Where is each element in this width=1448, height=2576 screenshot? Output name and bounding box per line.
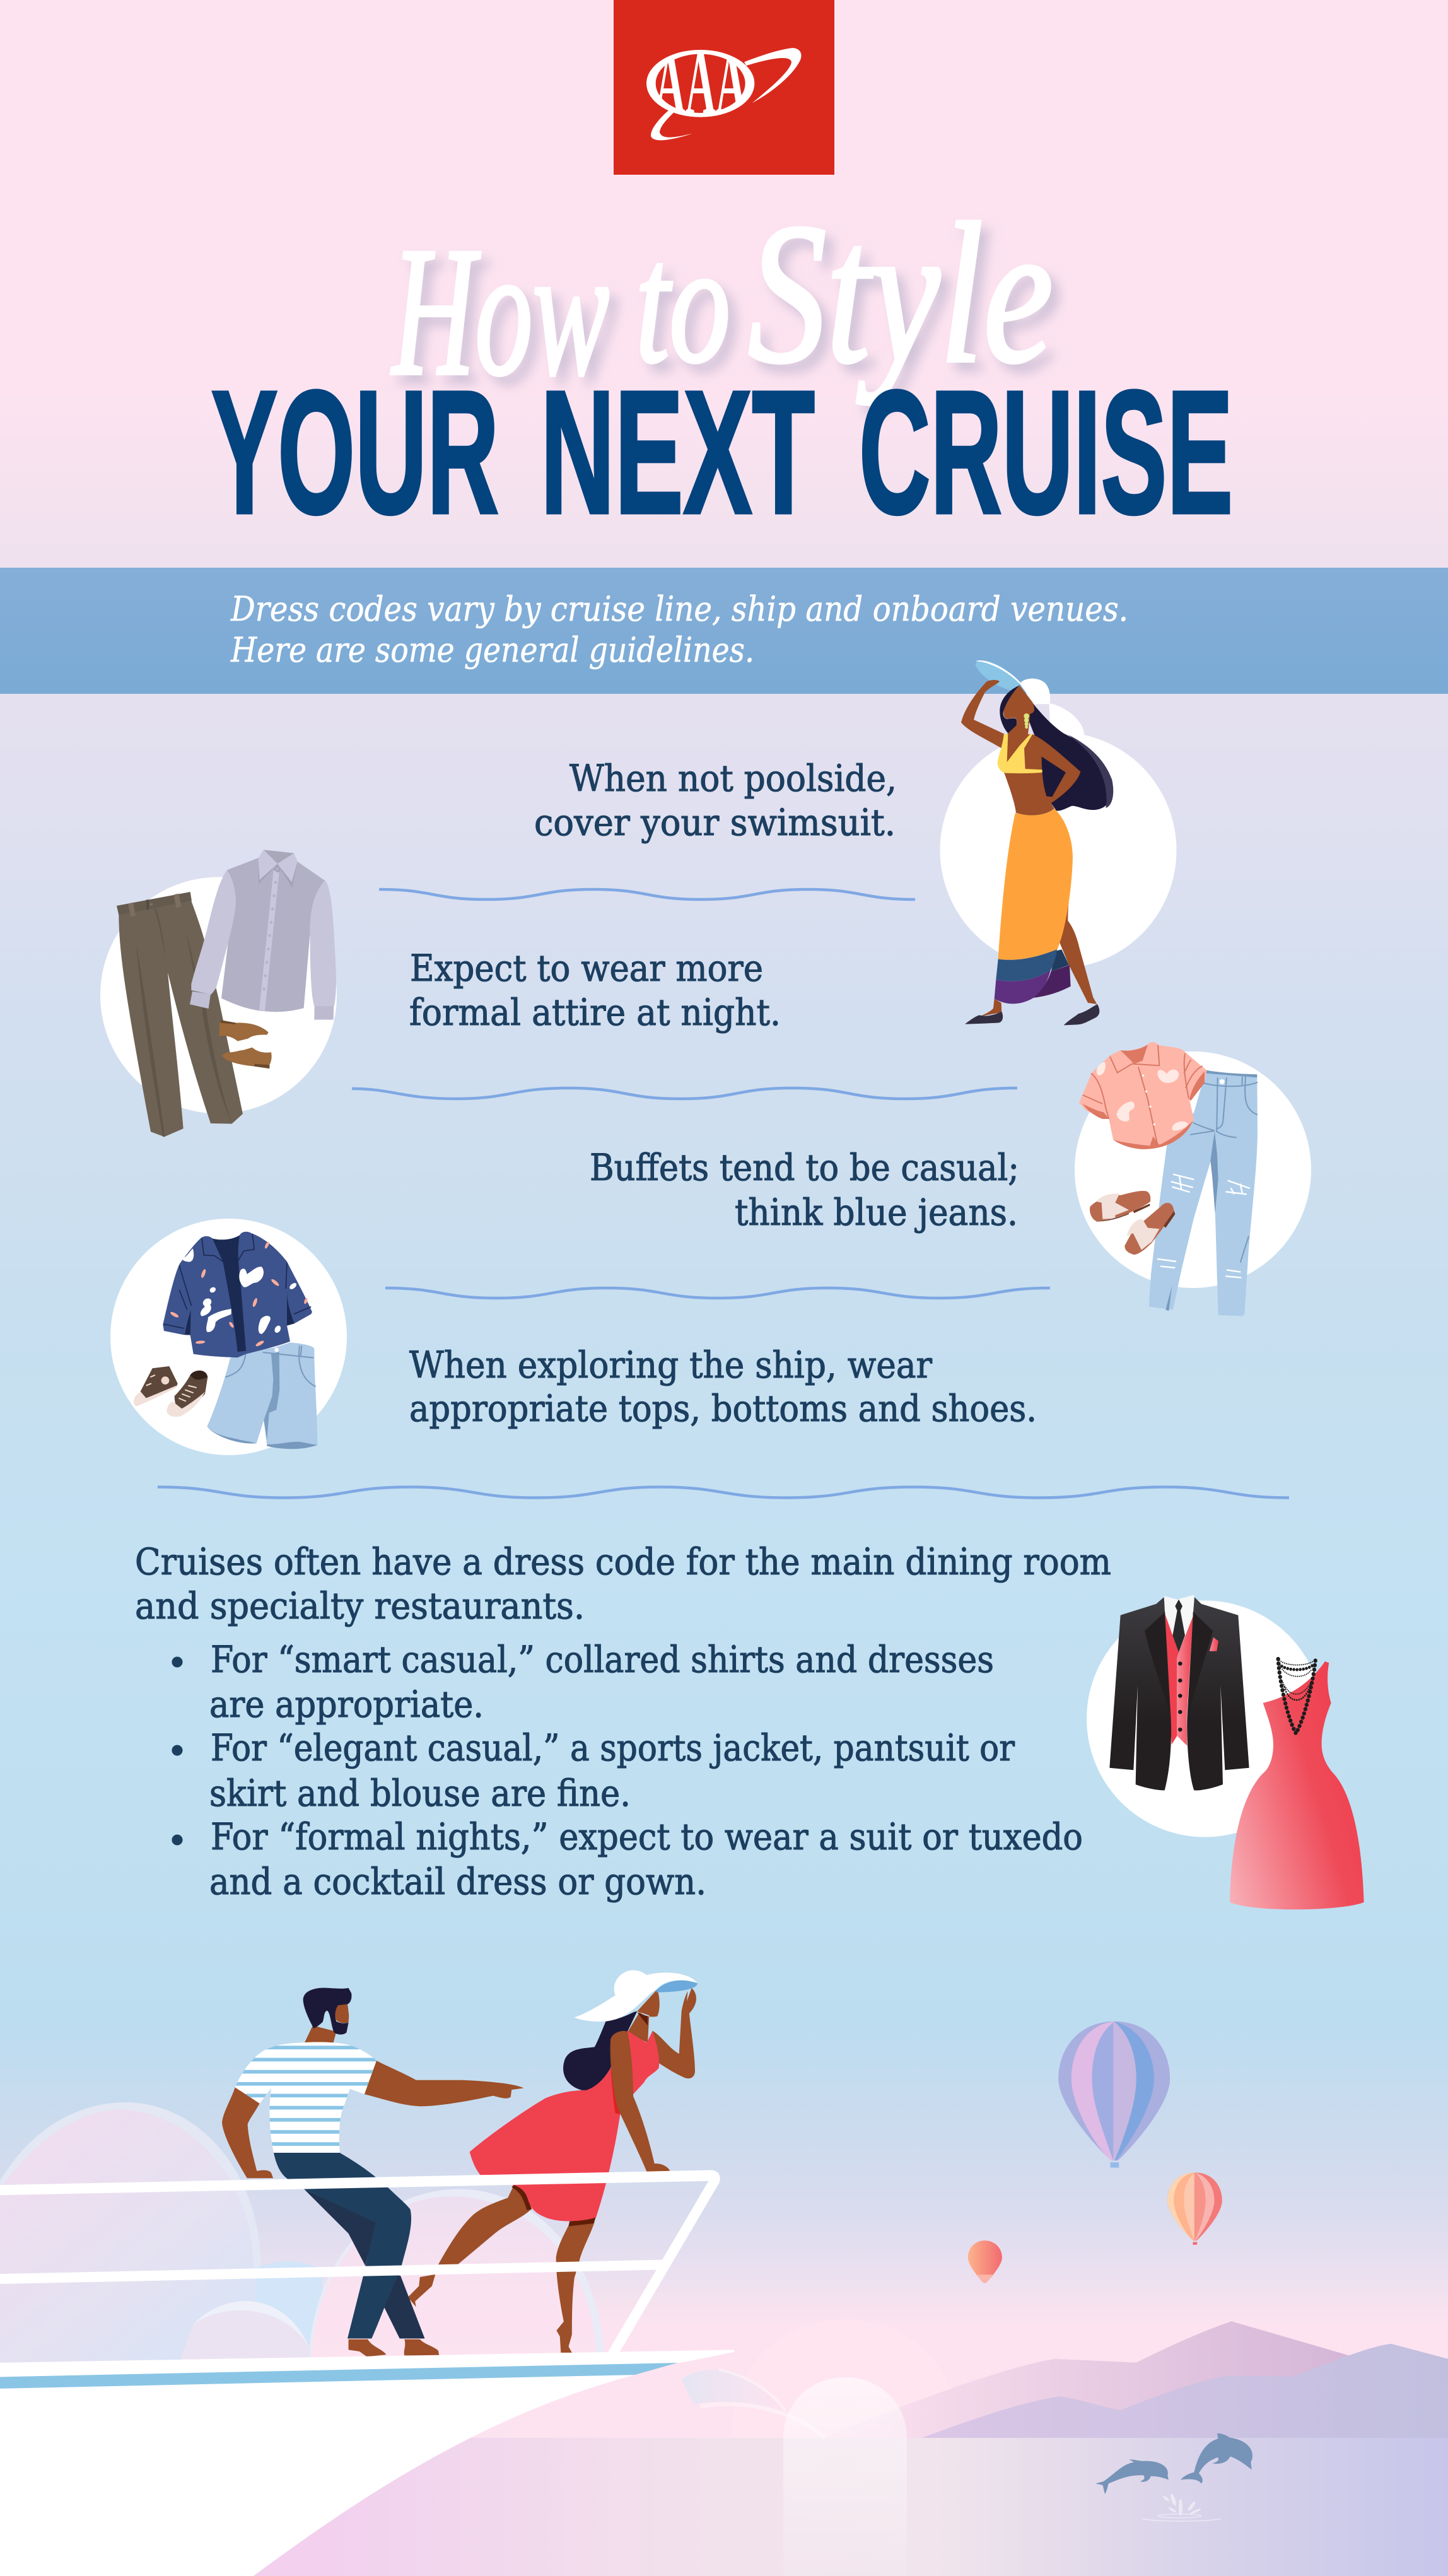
text: formal attire: Expect to wear more	[410, 947, 763, 990]
clouds	[0, 2102, 604, 2365]
text: dress code list: For “elegant casual,” a sports jacket, pantsuit or	[211, 1726, 1015, 1769]
text: exploring the ship: When exploring the ship, wear	[409, 1344, 932, 1386]
text: exploring the ship	[409, 1344, 1037, 1430]
balloons	[968, 2022, 1252, 2521]
intro banner: Dress codes vary by cruise line, ship and onboard venues.	[230, 589, 1128, 629]
dolphins and splash	[1095, 2433, 1252, 2521]
title: How to Style	[390, 182, 1053, 414]
illustration: pink shirt, jeans and sandals	[1075, 1042, 1311, 1316]
text: dress code list: skirt and blouse are fine.	[209, 1772, 631, 1815]
logo: AAA	[614, 0, 834, 175]
text: dress code list	[135, 1540, 1111, 1903]
man in striped shirt	[222, 1988, 523, 2356]
woman in red dress	[408, 1970, 698, 2353]
logo: AAA: AAA	[655, 31, 746, 134]
illustration: dress shirt, trousers and shoes	[100, 850, 337, 1137]
medium balloon	[1167, 2172, 1222, 2245]
large balloon	[1058, 2022, 1170, 2168]
text: buffets	[590, 1146, 1019, 1234]
text: buffets: think blue jeans.	[735, 1191, 1018, 1234]
text: when not poolside: cover your swimsuit.	[534, 801, 896, 844]
illustration: woman with hat and orange skirt	[940, 660, 1177, 1025]
intro banner: Here are some general guidelines.	[230, 630, 754, 670]
illustration: tuxedo, red vest and red dress	[1087, 1595, 1364, 1909]
text: dress code list: and specialty restaurants.	[135, 1584, 585, 1627]
illustration: hawaiian shirt, denim shorts and sneakers	[110, 1219, 347, 1455]
scene: couple on ship deck	[0, 1970, 735, 2576]
text: dress code list: For “formal nights,” expect to wear a suit or tuxedo	[211, 1815, 1083, 1858]
title: YOUR NEXT CRUISE	[211, 354, 1233, 550]
ship hull	[0, 2362, 680, 2576]
title: YOUR NEXT CRUISE: YOUR	[211, 354, 499, 550]
title: How to Style: How	[390, 210, 610, 414]
text: dress code list: For “smart casual,” collared shirts and dresses	[211, 1638, 994, 1681]
text: when not poolside	[534, 757, 897, 844]
text: dress code list: are appropriate.	[209, 1683, 484, 1726]
title: YOUR NEXT CRUISE: NEXT	[540, 354, 815, 550]
text: formal attire: formal attire at night.	[409, 991, 781, 1034]
text: when not poolside: When not poolside,	[569, 757, 897, 800]
scene: sea, mountains and sun	[0, 2319, 1448, 2576]
title: How to Style: Style	[748, 182, 1053, 405]
text: dress code list: and a cocktail dress or gown.	[209, 1860, 706, 1903]
deck railing	[0, 2170, 735, 2377]
text: dress code list: Cruises often have a dress code for the main dining room	[135, 1540, 1111, 1583]
title: How to Style: to	[636, 209, 730, 398]
text: exploring the ship: appropriate tops, bottoms and shoes.	[409, 1387, 1037, 1430]
intro banner	[0, 568, 1448, 694]
small balloon	[968, 2240, 1002, 2283]
text: formal attire	[409, 947, 781, 1034]
text: buffets: Buffets tend to be casual;	[590, 1146, 1019, 1189]
